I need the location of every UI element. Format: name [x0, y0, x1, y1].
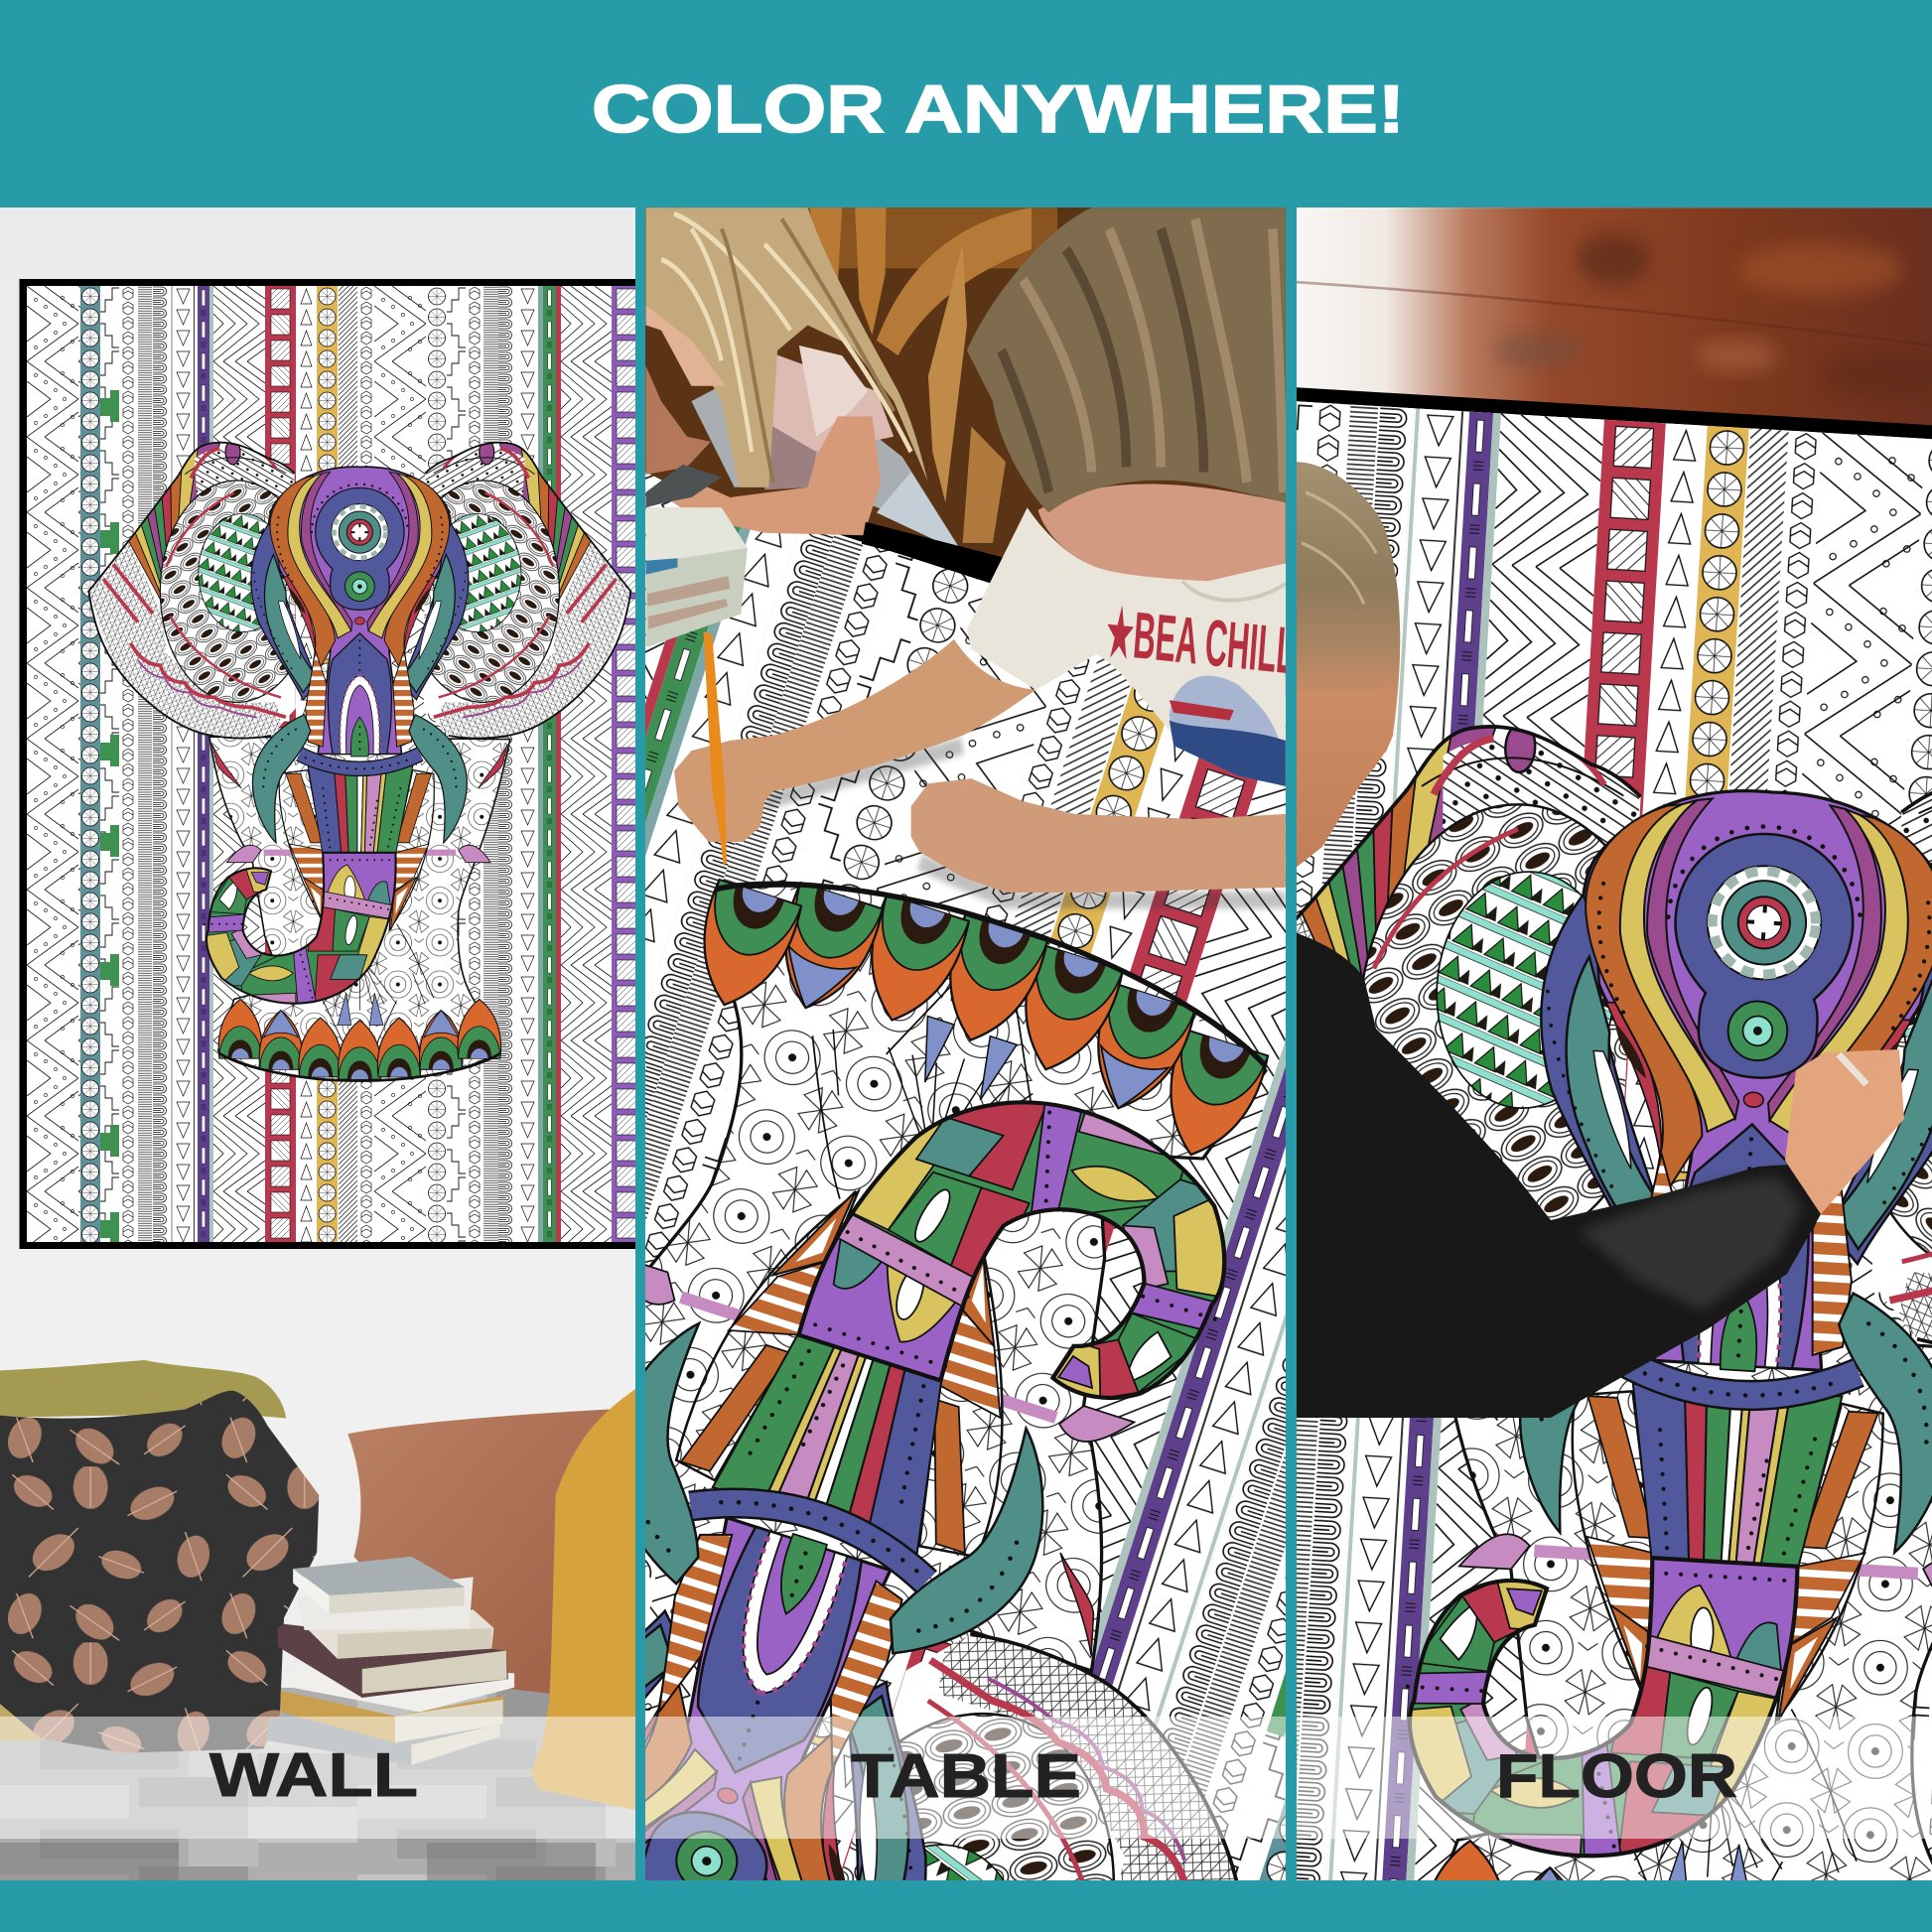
- boy's face: [1038, 483, 1286, 581]
- label band: floor: [1297, 1717, 1932, 1839]
- panel: wall scene: [0, 207, 635, 1880]
- girl: [645, 207, 963, 553]
- leaf patterned bag: [0, 1391, 319, 1753]
- title: COLOR ANYWHERE!: [592, 71, 1405, 147]
- room props: pillows, bag, books: [0, 1360, 635, 1810]
- boy's left arm: [674, 639, 1035, 842]
- whale print: [1170, 676, 1286, 786]
- photo: children colouring: [635, 204, 1311, 900]
- table background: [645, 207, 1286, 1880]
- boy's right arm: [911, 778, 1286, 893]
- gray poster corner: [645, 465, 722, 507]
- floor rug: [0, 1688, 635, 1880]
- hand with marker: [1785, 1049, 1904, 1214]
- boy's hair: [967, 207, 1286, 512]
- arm shadow: [764, 746, 1286, 900]
- rotated elephant poster on table: [0, 392, 1774, 1932]
- elephant poster on floor: [1000, 376, 1932, 1932]
- floor background: [1297, 207, 1932, 1880]
- label: table: TABLE: [851, 1742, 1081, 1811]
- boy's t-shirt: [967, 507, 1298, 788]
- sleeve folds: [1579, 1176, 1802, 1311]
- wooden chairs: [807, 207, 1057, 543]
- wall background: [0, 207, 635, 1880]
- wooden floor: [1297, 207, 1932, 427]
- label: floor: FLOOR: [1496, 1742, 1737, 1811]
- wicker basket: [0, 1700, 41, 1740]
- label band: wall: [0, 1717, 635, 1839]
- elephant poster on wall: [20, 279, 703, 1249]
- brown room background: [635, 204, 1311, 568]
- black sleeve: [1297, 933, 1821, 1418]
- mustard pouf: [531, 1389, 635, 1810]
- black poster edge: [864, 533, 1002, 568]
- orange pencil: [704, 631, 727, 866]
- label: wall: WALL: [209, 1741, 418, 1810]
- orange pillow: [347, 1409, 609, 1694]
- crayon box: [645, 507, 748, 647]
- panel: table scene: [645, 207, 1286, 1880]
- olive cloth: [0, 1360, 286, 1419]
- darker rug streaks: [0, 1843, 596, 1880]
- label band: table: [645, 1717, 1286, 1839]
- stack of books: [267, 1557, 514, 1765]
- man's head: [1297, 462, 1400, 867]
- panel: floor scene: [1297, 207, 1932, 1880]
